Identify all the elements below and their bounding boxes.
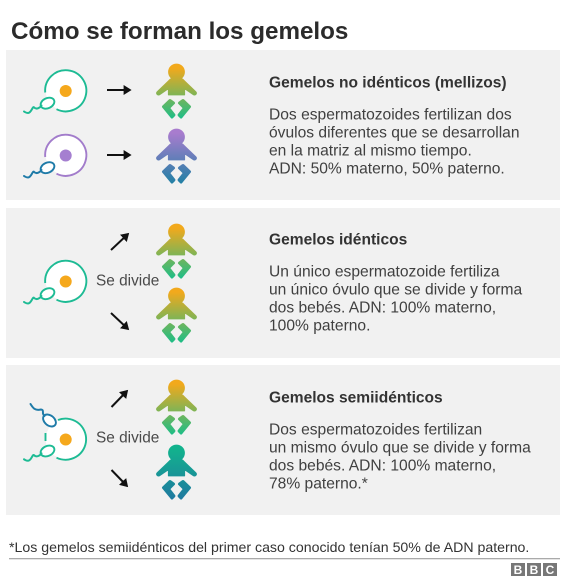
icon: green egg with sperm: [24, 70, 86, 113]
icon: baby green bottom: [157, 288, 196, 341]
heading: Gemelos idénticos: [269, 232, 408, 248]
description: dos bebés. ADN: 100% materno,: [269, 458, 496, 474]
description: un único óvulo que se divide y forma: [269, 282, 522, 298]
description: óvulos diferentes que se desarrollan: [269, 124, 520, 142]
description: dos bebés. ADN: 100% materno,: [269, 300, 496, 316]
arrow down: [111, 313, 128, 329]
description: Dos espermatozoides fertilizan: [269, 422, 482, 438]
icon: baby teal: [157, 445, 196, 498]
arrow: [107, 154, 130, 156]
panel: gemelos no idénticos: [6, 50, 560, 200]
footnote: *Los gemelos semiidénticos del primer caso conocido tenían 50% de ADN paterno.: [9, 539, 529, 555]
icon: egg with two sperm: [24, 404, 86, 461]
panel: gemelos idénticos: [6, 208, 560, 358]
description: Dos espermatozoides fertilizan dos: [269, 106, 512, 124]
BBC logo: [511, 563, 557, 577]
BBC logo: B: [514, 563, 523, 577]
description: ADN: 50% materno, 50% paterno.: [269, 160, 505, 178]
icon: baby green: [157, 380, 196, 433]
description: 100% paterno.: [269, 318, 370, 334]
label: se divide: Se divide: [96, 430, 159, 446]
icon: baby purple: [157, 129, 196, 182]
label: se divide: Se divide: [96, 272, 159, 290]
heading: Gemelos no idénticos (mellizos): [269, 74, 507, 92]
BBC logo: B: [530, 563, 539, 577]
title: Cómo se forman los gemelos: [11, 18, 348, 45]
BBC logo: C: [546, 563, 555, 577]
arrow down: [112, 470, 127, 486]
arrow up: [112, 391, 127, 407]
arrow: [107, 89, 130, 91]
arrow up: [111, 234, 128, 250]
icon: purple egg with sperm: [24, 135, 86, 178]
icon: green egg with sperm: [24, 261, 86, 304]
description: en la matriz al mismo tiempo.: [269, 142, 472, 160]
heading: Gemelos semiidénticos: [269, 390, 443, 406]
icon: baby green: [157, 64, 196, 117]
description: Un único espermatozoide fertiliza: [269, 264, 500, 280]
icon: baby green top: [157, 224, 196, 277]
panel: gemelos semiidénticos: [6, 365, 560, 515]
description: un mismo óvulo que se divide y forma: [269, 440, 531, 456]
description: 78% paterno.*: [269, 476, 368, 492]
